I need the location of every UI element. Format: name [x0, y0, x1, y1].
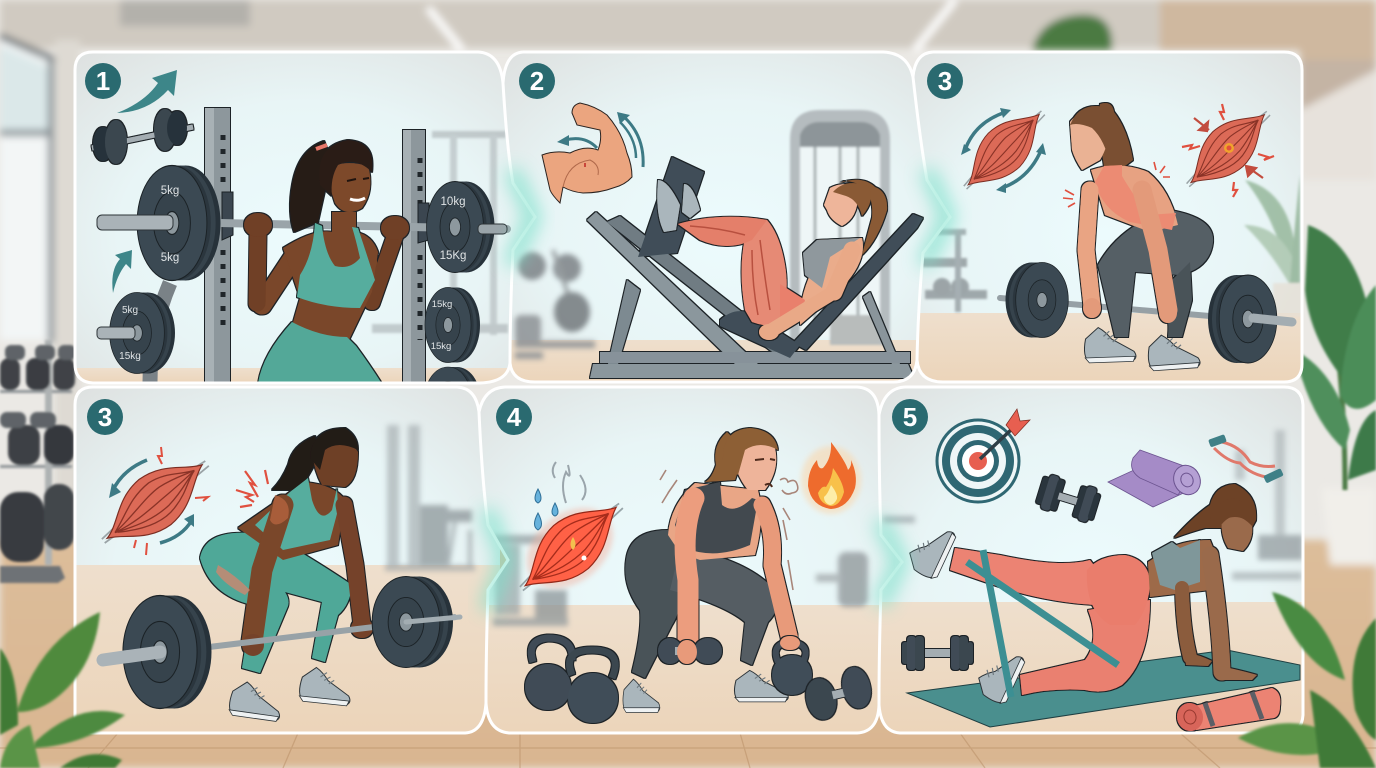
icon: muscle with stretch arrows	[949, 96, 1059, 204]
panel 5: fatigue	[470, 385, 900, 740]
scrunchie and face	[347, 178, 369, 181]
barbell	[103, 576, 460, 708]
athlete on all fours	[950, 484, 1257, 695]
rack holes	[223, 135, 420, 340]
panel 2: leg press	[500, 50, 960, 385]
blurred background rack	[372, 131, 508, 335]
badge 1	[85, 63, 121, 99]
plates left: 5kg	[161, 252, 179, 264]
rack support	[150, 283, 170, 382]
rack hooks	[222, 192, 429, 243]
transition glow 4	[880, 520, 900, 605]
transition glow 3	[487, 510, 506, 610]
dumbbell in hand	[658, 638, 722, 664]
wood floor planks	[0, 733, 1376, 768]
athlete on leg press	[657, 180, 887, 340]
badge 3 second: 3	[98, 402, 112, 432]
panel 3: deadlift setup	[905, 50, 1305, 385]
badge 4	[496, 399, 532, 435]
top glow panel 4	[505, 387, 855, 397]
squat rack	[205, 108, 425, 383]
leg press machine	[587, 157, 923, 378]
blurred background rack and plant	[922, 175, 1303, 317]
face detail	[755, 459, 775, 487]
plates right: 10kg	[441, 196, 465, 208]
shoes	[904, 520, 1026, 706]
icon: fire	[801, 442, 861, 514]
panel borders	[75, 52, 1303, 733]
barbell	[172, 222, 507, 229]
barbell rear	[997, 295, 1208, 319]
floor dumbbell	[801, 664, 876, 723]
plates left: 5kg	[161, 185, 179, 197]
transition glow 1	[511, 170, 533, 265]
shoes	[228, 666, 353, 722]
badge 2	[519, 63, 555, 99]
athlete fatigued	[625, 428, 790, 678]
blurred background machine	[385, 425, 475, 571]
dumbbell rack	[0, 340, 76, 583]
plates left	[97, 166, 220, 280]
icon: dumbbell	[92, 109, 193, 164]
badge 3 second	[87, 399, 123, 435]
icon: growth arrow	[117, 70, 177, 113]
athlete squatting	[244, 140, 409, 384]
icon: yoga mat	[1108, 450, 1205, 507]
stacked plates right: 15kg	[432, 299, 452, 310]
athlete deadlifting	[1070, 103, 1213, 337]
rolled mat	[1174, 688, 1280, 733]
plant: bottom right	[1238, 592, 1376, 768]
resistance band	[967, 550, 1118, 697]
blurred background equipment	[883, 430, 1303, 580]
floor dumbbell	[902, 636, 973, 670]
icon: flexed arm	[542, 103, 643, 203]
icon: target	[937, 409, 1030, 502]
stacked plates left: 15kg	[119, 351, 141, 362]
barbell plates	[1006, 262, 1292, 363]
panel 6: band exercise	[875, 385, 1305, 737]
badge 5: 5	[903, 402, 917, 432]
background machine	[790, 110, 890, 345]
transition glow 2	[924, 170, 948, 265]
strain marks	[236, 470, 268, 507]
badge 3	[927, 63, 963, 99]
stacked plates left	[97, 292, 175, 374]
panel 4: deep deadlift	[70, 385, 500, 735]
stacked plates right: 15kg	[431, 341, 451, 352]
plates right: 15Kg	[440, 250, 466, 262]
plant: bottom left	[0, 612, 125, 768]
leg muscle definition	[690, 226, 770, 315]
kettlebell in hand	[772, 636, 812, 695]
kettlebells	[525, 638, 618, 723]
stacked plates right	[424, 287, 480, 382]
icon: strained muscle	[1172, 96, 1284, 202]
badge 3: 3	[938, 66, 952, 96]
icon: small up arrow	[112, 250, 132, 293]
exercise mat	[907, 650, 1300, 727]
horizontal glow under top row	[265, 380, 900, 388]
shoes	[1084, 326, 1200, 371]
athlete deep deadlift	[200, 428, 373, 673]
shoulder muscle highlight	[270, 495, 289, 525]
icon: dumbbell	[1034, 472, 1102, 524]
icon: muscle with arrows	[86, 442, 224, 562]
plant: right wall	[1294, 225, 1376, 490]
badge 5	[892, 399, 928, 435]
thigh highlight	[216, 565, 250, 595]
shoes	[623, 670, 788, 712]
strain marks	[1063, 162, 1170, 207]
badge 2: 2	[530, 66, 544, 96]
blurred background equipment	[492, 535, 868, 626]
icon: resistance band	[1208, 434, 1284, 483]
panel 1: barbell squat	[76, 54, 521, 382]
badge 1: 1	[96, 66, 110, 96]
plates right	[427, 182, 507, 272]
icon: sweating muscle	[503, 462, 639, 609]
background weight rack	[515, 250, 595, 359]
badge 4: 4	[507, 402, 522, 432]
breath and sweat marks	[660, 470, 798, 590]
stacked plates left: 5kg	[122, 305, 138, 316]
